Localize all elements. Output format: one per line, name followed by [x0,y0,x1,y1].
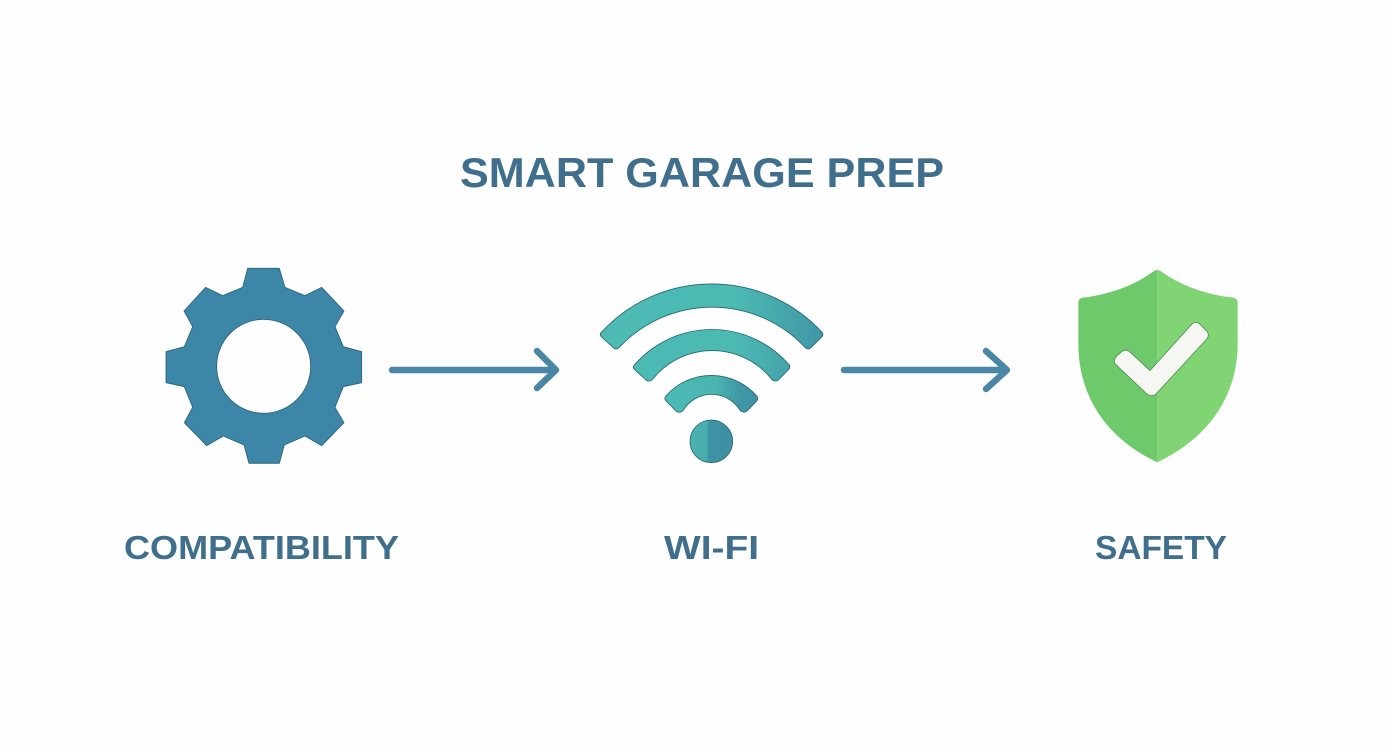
label: compatibility: COMPATIBILITY [124,530,399,567]
shield left half [1078,270,1157,462]
label: wi-fi: WI-FI [664,530,759,567]
label: safety: SAFETY [1095,530,1227,567]
wi-fi outer arc [600,284,823,349]
wi-fi dot [690,420,733,463]
arrow: wi-fi to safety [844,351,1007,389]
wi-fi inner arc [665,375,758,412]
icon: gear [166,268,362,463]
icon: shield with check [1078,270,1238,462]
check mark [1114,322,1208,396]
title: SMART GARAGE PREP [460,149,944,196]
shield right half [1157,270,1238,462]
arrow: compatibility to wi-fi [392,351,556,388]
wi-fi middle arc [633,329,790,381]
icon: wi-fi [600,284,823,463]
